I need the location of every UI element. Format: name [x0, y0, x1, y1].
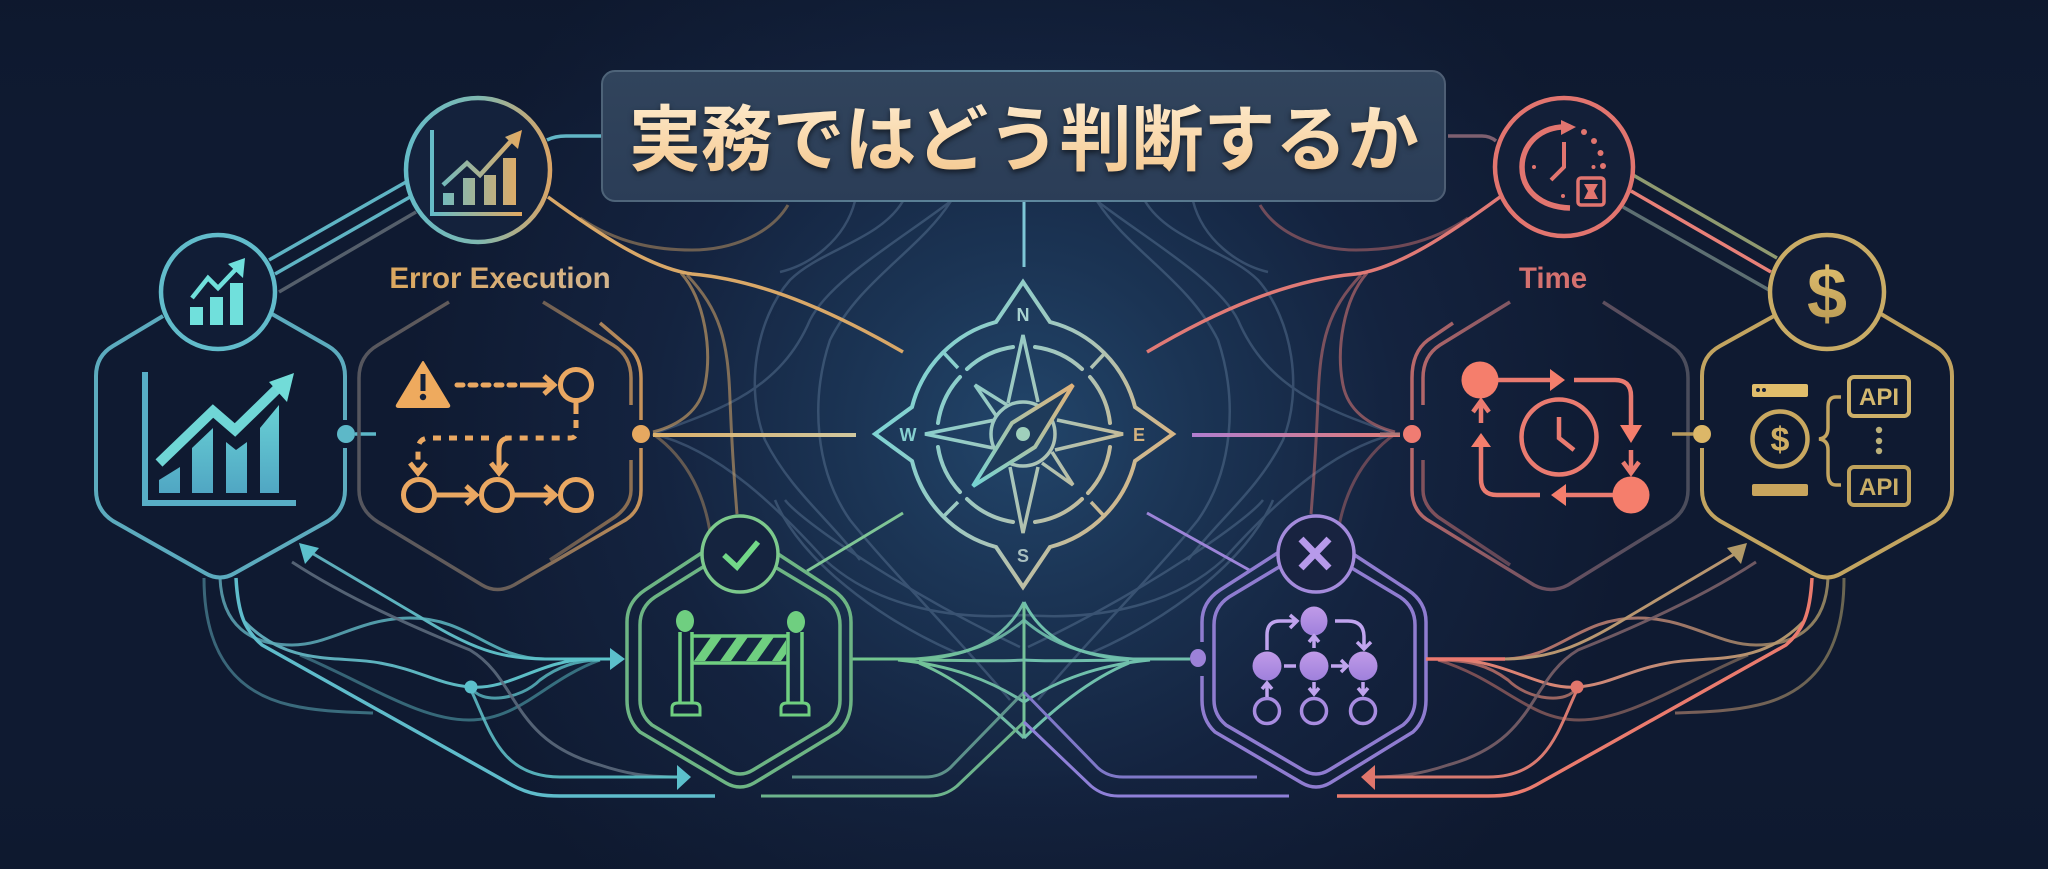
hexagon outlines [627, 552, 851, 787]
compass letters: E [1133, 425, 1145, 445]
icon: API brace [1819, 397, 1841, 485]
title text: 実務ではどう判断するか [629, 81, 1419, 186]
icon: barrier [672, 610, 809, 715]
title panel [602, 71, 1445, 201]
icon: payment card with dollar [1752, 384, 1808, 496]
connectors: gold lines from upper-left circle to compass [548, 197, 903, 532]
connector web: centre, right side [1024, 201, 1395, 700]
connector: compass to purple hexagon [1147, 513, 1251, 571]
connectors: time circle to dollar circle [1448, 136, 1777, 290]
compass needle [973, 385, 1073, 486]
connector: compass to green hexagon [807, 513, 903, 571]
hexagon outline [1412, 302, 1688, 590]
circle: stopwatch [1495, 98, 1633, 236]
hexagon: time panel [1380, 302, 1688, 590]
compass letters [900, 305, 1145, 566]
label: Error Execution: Error Execution [389, 262, 611, 295]
circle: small growth chart [161, 235, 275, 349]
icon: node dot [1380, 425, 1421, 443]
circle: dollar [1770, 235, 1884, 349]
icon: node dot [1672, 425, 1711, 443]
circle: cross mark [1278, 516, 1354, 592]
icon: API box upper [1849, 377, 1909, 416]
hexagon: barrier panel [627, 552, 851, 787]
icon: decision tree [1252, 606, 1378, 724]
arrowheads: lower left [299, 543, 691, 790]
compass star [925, 335, 1123, 533]
flow network: lower left [204, 549, 715, 796]
compass outer body [875, 282, 1173, 587]
icon: big rising chart [145, 372, 296, 503]
flow network: lower right [1337, 549, 1844, 796]
icon: loop nodes and arrowheads [1462, 362, 1650, 514]
icon: warning triangle [397, 362, 449, 407]
connector: compass east line [1192, 433, 1400, 437]
circle: upper left chart [406, 98, 550, 242]
circle: dollar: $ [1807, 254, 1847, 334]
icon: node dot [337, 425, 376, 443]
icon: node dot [632, 425, 650, 443]
connectors: teal circle to upper circle [269, 136, 602, 292]
centre-bottom vertical spine [1022, 602, 1026, 738]
circle: check mark [702, 516, 778, 592]
connectors: salmon lines from upper-right circle to compass [1147, 197, 1500, 532]
hexagon outlines [1202, 552, 1426, 787]
icon: API box lower: API [1859, 474, 1899, 501]
compass letters: N [1016, 305, 1030, 325]
arrowheads: lower right [1361, 543, 1747, 790]
connector: purple hexagon to right [1426, 657, 1505, 661]
hexagon: chart panel [96, 314, 376, 578]
hexagon: decision tree panel [1190, 552, 1505, 787]
connector: compass to title [1022, 201, 1026, 267]
compass [875, 282, 1173, 587]
hexagon: dollar API panel [1672, 314, 1952, 578]
compass letters: S [1017, 546, 1029, 566]
icon: ellipsis dots [1876, 427, 1882, 454]
icon: API box upper: API [1859, 384, 1899, 411]
icon: error flow diagram [404, 370, 592, 510]
compass letters: W [900, 425, 916, 445]
icon: time cycle loop [1473, 380, 1639, 495]
connector web: centre, left side [653, 201, 1024, 700]
compass inner dashed ring [938, 347, 1110, 522]
hexagon outline [1702, 314, 1952, 578]
centre-bottom purple web [1024, 602, 1289, 796]
hexagon outline [359, 302, 641, 590]
centre-bottom green web [761, 602, 1024, 796]
connector: compass west line [653, 433, 856, 437]
hexagon outline [96, 314, 345, 578]
compass diagonal ticks [943, 352, 1105, 517]
icon: node dot [1190, 649, 1206, 667]
icon: payment card with dollar: $ [1771, 421, 1790, 459]
label: Time: Time [1519, 262, 1587, 295]
hexagon: error execution panel [359, 302, 650, 590]
icon: API box lower [1849, 467, 1909, 505]
compass pivot [1016, 427, 1030, 441]
